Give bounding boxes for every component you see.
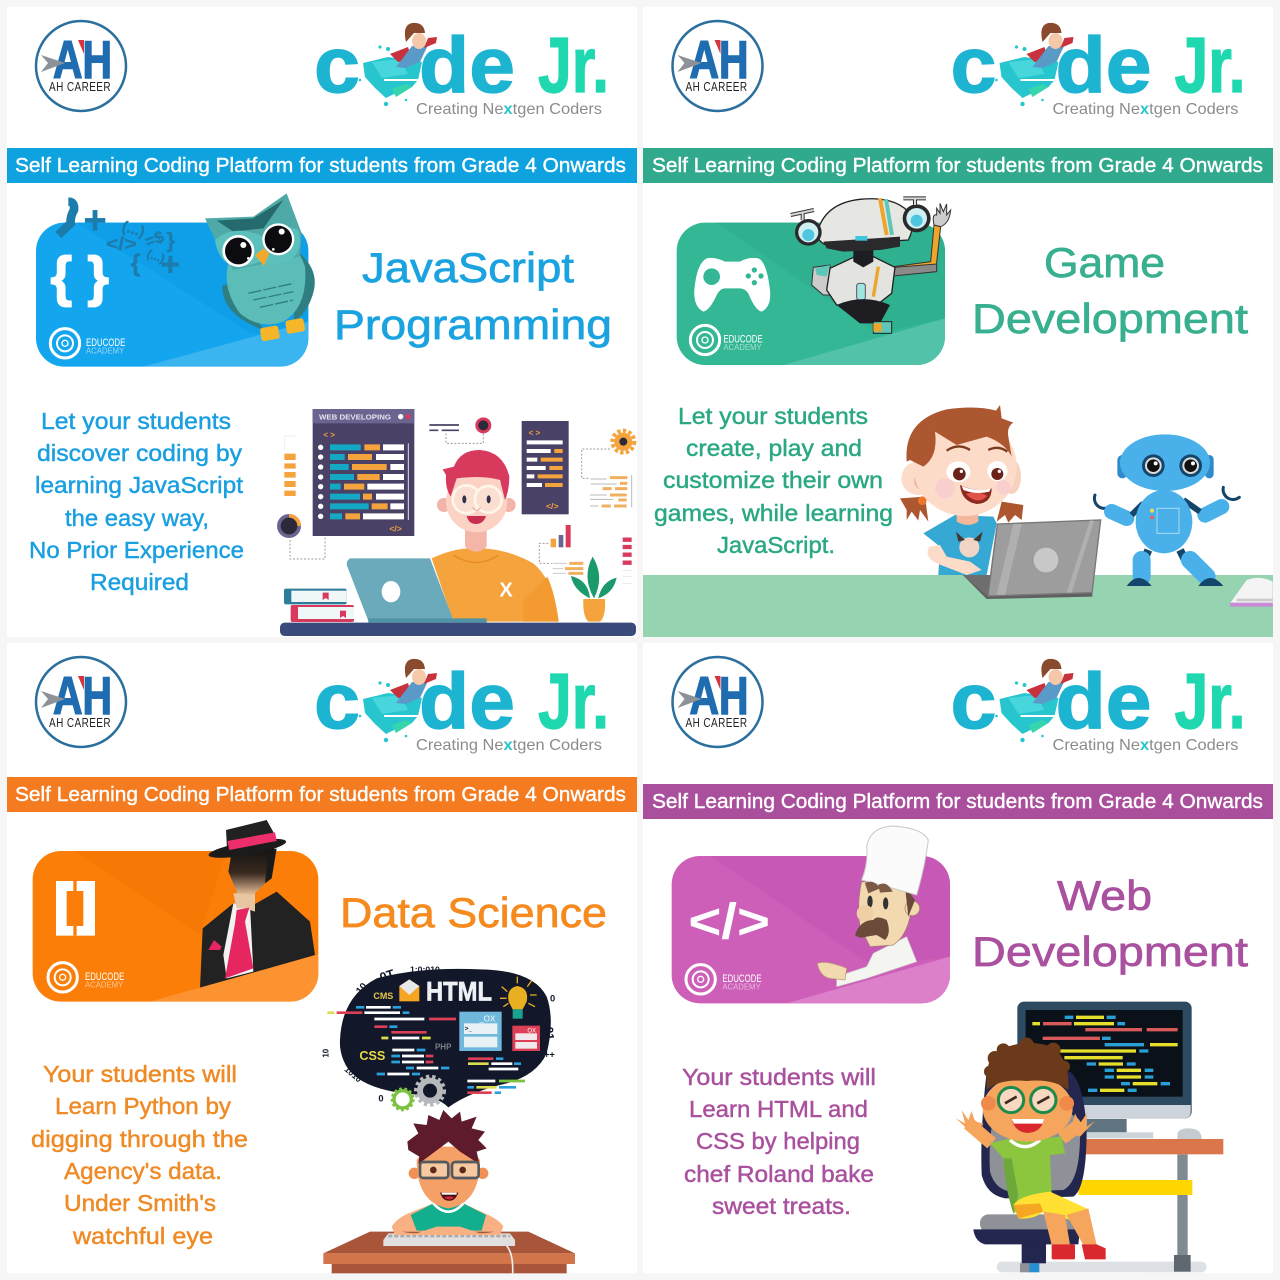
description: learning JavaScript — [35, 472, 244, 498]
card highlight — [787, 957, 950, 1003]
header: logos: AH — [53, 31, 112, 90]
character: X — [499, 580, 513, 602]
header: logos: AH CAREER — [686, 81, 747, 94]
thought bubble: >_ — [465, 1026, 473, 1033]
educode logo: ACADEMY — [86, 346, 125, 355]
thought bubble: CMS — [373, 991, 393, 1001]
boy — [392, 1110, 503, 1232]
icon: curly braces — [51, 245, 109, 307]
banner: Self Learning Coding Platform for students from Grade 4 Onwards — [652, 790, 1263, 813]
description: the easy way, — [65, 505, 209, 531]
banner: Self Learning Coding Platform for students from Grade 4 Onwards — [652, 154, 1263, 177]
banner — [7, 148, 637, 183]
code window: </> — [389, 523, 402, 533]
title — [334, 244, 612, 348]
panel: Web Development — [643, 643, 1273, 1273]
description: Let your students — [678, 403, 868, 429]
header: logos: AH CAREER — [49, 717, 111, 730]
description: Agency's data. — [64, 1158, 222, 1184]
educode logo: EDUCODE — [86, 337, 126, 349]
description: JavaScript. — [717, 532, 835, 558]
illustration: girl with laptop and robot — [900, 405, 1273, 607]
thought bubble: 0 — [550, 994, 555, 1004]
illustration: owl — [205, 193, 315, 342]
educode logo: EDUCODE — [723, 334, 763, 346]
icon: code symbols: (...) — [120, 218, 147, 241]
illustration: chef — [817, 826, 928, 987]
icon: game controller — [694, 258, 770, 312]
thought bubble: 01 — [542, 1026, 557, 1041]
card highlight — [783, 318, 945, 365]
code window: WEB DEVELOPING — [319, 413, 391, 422]
description: watchful eye — [72, 1223, 213, 1249]
kid — [956, 1038, 1106, 1259]
code window small — [522, 421, 569, 514]
floor — [643, 575, 1273, 637]
monitor — [1017, 1002, 1192, 1138]
panel: JavaScript Programming — [7, 7, 637, 637]
panel: Game Development — [643, 7, 1273, 637]
code window: < > — [323, 430, 335, 439]
course card with robot — [677, 198, 951, 365]
description: No Prior Experience — [29, 537, 244, 563]
description: Learn HTML and — [689, 1096, 868, 1122]
description — [654, 403, 893, 558]
header: logos: Jr. — [538, 20, 609, 109]
description: Your students will — [43, 1061, 237, 1087]
illustration: web developer — [277, 409, 636, 636]
header: logos: Creating Nextgen Coders — [1052, 101, 1238, 118]
header: logos: de — [419, 20, 515, 109]
description: Required — [90, 569, 189, 595]
banner — [643, 148, 1273, 183]
icon: code symbols: =$ — [142, 227, 167, 251]
header: logos — [672, 20, 1246, 118]
header: logos: AH CAREER — [49, 81, 111, 94]
header: logos: c — [314, 20, 360, 109]
description: customize their own — [663, 467, 883, 493]
icon: code symbols — [58, 198, 180, 283]
description: Under Smith's — [64, 1190, 216, 1216]
description: create, play and — [686, 435, 862, 461]
code window small: </> — [546, 501, 559, 511]
title — [972, 239, 1248, 342]
illustration: kid at desk — [956, 1002, 1223, 1272]
description: digging through the — [31, 1126, 248, 1152]
icon: code symbols: + — [161, 246, 180, 283]
thought bubble: PHP — [435, 1042, 452, 1051]
thought bubble — [321, 965, 557, 1107]
educode logo: ACADEMY — [723, 343, 762, 352]
title: Development — [972, 928, 1248, 975]
educode logo — [690, 325, 763, 355]
card highlight — [150, 954, 318, 1002]
header: logos: Creating Nextgen Coders — [416, 737, 602, 754]
icon: code symbols: + — [83, 198, 107, 242]
character — [432, 450, 559, 622]
thought bubble: 10 — [321, 1048, 330, 1058]
thought bubble: 1010 — [343, 1064, 364, 1084]
header: logos: de — [1056, 656, 1152, 745]
code window small: < > — [529, 428, 541, 437]
thought bubble: 1:0:010 — [410, 965, 440, 975]
laptop — [347, 558, 487, 623]
header: logos: AH CAREER — [686, 717, 747, 730]
icon: curly braces: { — [51, 245, 72, 307]
code window — [313, 409, 414, 536]
robot — [1094, 434, 1239, 586]
title: JavaScript — [362, 244, 574, 291]
icon: code symbols: (...) — [145, 247, 167, 266]
header: logos: AH — [690, 667, 748, 726]
description: Your students will — [682, 1064, 876, 1090]
thought bubble: _OX — [478, 1014, 496, 1023]
header: logos — [36, 656, 609, 754]
header: logos: c — [314, 656, 360, 745]
educode logo: ACADEMY — [85, 980, 124, 989]
gears — [392, 1076, 444, 1110]
thought bubble: 0T — [378, 967, 397, 985]
desk — [997, 1128, 1223, 1272]
header: logos: Creating Nextgen Coders — [416, 101, 602, 118]
icon: code tag: </> — [688, 893, 770, 949]
icon: curly braces: } — [87, 245, 109, 307]
educode logo — [686, 965, 762, 994]
header: logos — [672, 656, 1246, 754]
icon: code symbols: </> — [106, 233, 137, 254]
title: Game — [1044, 239, 1165, 286]
educode logo — [48, 963, 125, 992]
books — [284, 589, 354, 622]
banner — [7, 777, 637, 812]
thought bubble: _OX — [523, 1028, 536, 1034]
educode logo: EDUCODE — [722, 973, 762, 985]
icon: code symbols: { — [131, 250, 141, 278]
header: logos: AH — [690, 31, 748, 90]
icon: code symbols: } — [167, 228, 175, 252]
course card with chef — [672, 826, 950, 1003]
header: logos: Jr. — [538, 656, 609, 745]
description — [682, 1064, 876, 1219]
header: logos: c — [950, 656, 996, 745]
icon: brackets — [56, 881, 95, 936]
header: logos: Jr. — [1174, 20, 1246, 109]
description: chef Roland bake — [684, 1161, 874, 1187]
header: logos — [36, 20, 609, 118]
book — [1230, 578, 1273, 607]
illustration: robot — [791, 198, 951, 333]
description: Let your students — [41, 408, 231, 434]
description: sweet treats. — [712, 1193, 851, 1219]
header: logos: de — [419, 656, 515, 745]
desk and keyboard — [323, 1227, 575, 1273]
description: discover coding by — [37, 440, 243, 466]
course card with owl — [36, 193, 315, 367]
illustration: agent — [200, 820, 315, 988]
plant — [571, 557, 617, 622]
header: logos: AH — [53, 667, 112, 726]
banner — [643, 784, 1273, 819]
description: Learn Python by — [55, 1093, 232, 1119]
title: Programming — [334, 301, 612, 348]
educode logo — [50, 329, 126, 358]
illustration: coder with thought bubble — [321, 965, 575, 1273]
title: Web — [1057, 872, 1152, 919]
banner: Self Learning Coding Platform for students from Grade 4 Onwards — [15, 783, 626, 806]
thought bubble: HTML — [426, 977, 492, 1007]
title: Development — [972, 295, 1248, 342]
laptop — [963, 520, 1101, 599]
title — [972, 872, 1248, 975]
girl — [900, 405, 1023, 575]
thought bubble: 10 — [539, 1011, 551, 1022]
banner: Self Learning Coding Platform for students from Grade 4 Onwards — [15, 154, 626, 177]
header: logos: Jr. — [1174, 656, 1246, 745]
thought bubble: ++ — [544, 1049, 555, 1059]
desk — [280, 623, 636, 636]
educode logo: ACADEMY — [722, 982, 761, 991]
description — [29, 408, 244, 595]
description — [31, 1061, 248, 1249]
thought bubble: 10 — [354, 981, 370, 997]
thought bubble: 0 — [378, 1094, 384, 1104]
panel: Data Science — [7, 643, 637, 1273]
chair — [973, 1072, 1087, 1272]
title: Data Science — [340, 889, 607, 936]
educode logo: EDUCODE — [85, 971, 125, 983]
description: games, while learning — [654, 500, 893, 526]
header: logos: de — [1056, 20, 1152, 109]
header: logos: c — [950, 20, 996, 109]
course card with agent — [33, 820, 318, 1002]
thought bubble: CSS — [359, 1049, 385, 1063]
header: logos: Creating Nextgen Coders — [1052, 737, 1238, 754]
decorations — [277, 417, 634, 583]
description: CSS by helping — [696, 1128, 860, 1154]
